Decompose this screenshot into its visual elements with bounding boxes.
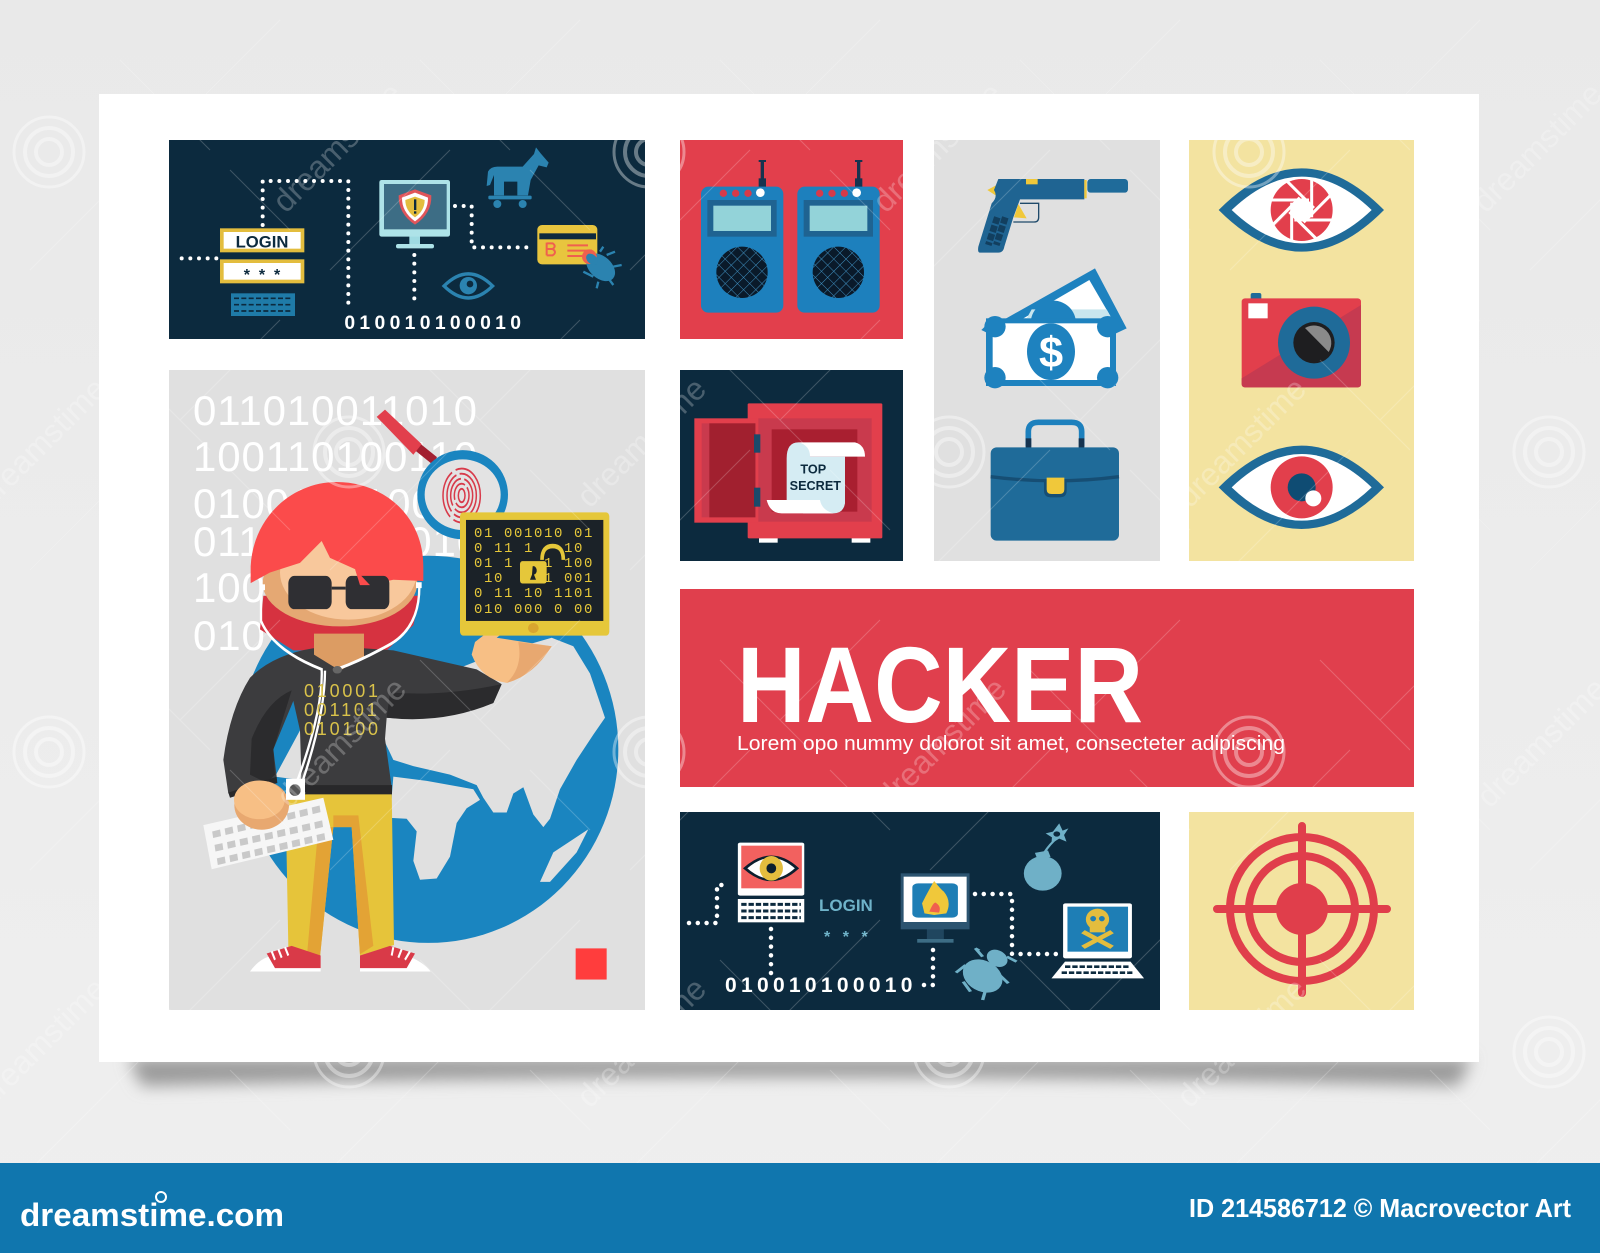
icon: open safe bbox=[694, 403, 882, 543]
connector dots bbox=[689, 885, 1058, 985]
icon: walkie talkie left bbox=[701, 160, 783, 313]
icon: open padlock bbox=[520, 546, 563, 583]
panel: attack network bbox=[680, 812, 1160, 1010]
character: sunglasses bbox=[288, 569, 389, 609]
panel: login network bbox=[169, 140, 645, 339]
watermark overlay: dreamstime bbox=[569, 370, 713, 514]
icon: walkie talkie right bbox=[797, 160, 880, 313]
password field: * * * bbox=[244, 267, 281, 284]
tablet binary text: 01 1 1 100 bbox=[474, 556, 594, 572]
connector dots bbox=[182, 181, 533, 307]
logo spiral bbox=[156, 1192, 166, 1202]
subtitle: Lorem opo nummy dolorot sit amet, consecteter adipiscing bbox=[737, 733, 1285, 755]
password field bbox=[220, 259, 304, 284]
icon: bug bbox=[955, 947, 1017, 1000]
icon: shutter eye bbox=[1219, 168, 1384, 252]
character: back hair bbox=[260, 596, 420, 650]
character: sweater bbox=[223, 648, 502, 798]
panel: walkie talkies bbox=[680, 140, 903, 339]
sweater binary text: 001101 bbox=[304, 700, 380, 720]
panel: gun money briefcase bbox=[934, 140, 1160, 561]
binary background text: 100110 bbox=[193, 564, 335, 611]
character: left hand bbox=[234, 780, 289, 830]
character: keyboard bbox=[203, 798, 333, 869]
title: HACKER bbox=[737, 624, 1143, 745]
binary background text bbox=[193, 387, 484, 659]
character: hair fringe bbox=[251, 482, 423, 585]
panel: safe bbox=[680, 370, 903, 561]
icon: dollar bills bbox=[981, 268, 1127, 388]
tablet binary text: 0 11 1 10 bbox=[474, 541, 584, 557]
sweater binary text: 010001 bbox=[304, 681, 381, 701]
watermark overlay: dreamstime bbox=[265, 75, 409, 219]
icon: bug bbox=[581, 247, 622, 288]
accent square bbox=[576, 948, 607, 980]
watermark overlay: dreamstime bbox=[869, 670, 1013, 814]
login field bbox=[220, 228, 304, 252]
footer logo: dreamstime.com bbox=[20, 1197, 284, 1233]
character: neck bbox=[314, 634, 364, 671]
binary string: 010010100010 bbox=[344, 313, 525, 334]
icon: secret document: SECRET bbox=[790, 479, 841, 493]
character: id badge bbox=[286, 779, 305, 800]
panel: target bbox=[1189, 812, 1414, 1010]
white card bbox=[99, 94, 1479, 1062]
icon: secret document: TOP bbox=[800, 462, 827, 476]
watermark overlay: dreamstime bbox=[865, 75, 1009, 219]
watermark overlay: dreamstime bbox=[569, 970, 713, 1114]
tablet binary text: 010 000 0 00 bbox=[474, 602, 594, 618]
login field: LOGIN bbox=[236, 232, 288, 251]
watermark overlay: dreamstime bbox=[1169, 370, 1313, 514]
icon: monitor with shield bbox=[379, 180, 450, 248]
icon: red iris eye bbox=[1219, 446, 1384, 529]
panel: eyes and camera bbox=[1189, 140, 1414, 561]
panel: hacker title banner bbox=[680, 589, 1414, 787]
binary background text: 010010010010 bbox=[193, 480, 484, 527]
icon: secret document bbox=[767, 442, 865, 513]
tablet binary text: 0 11 10 1101 bbox=[474, 586, 594, 602]
card shadow bbox=[128, 1058, 1472, 1086]
binary background text: 100110100110 bbox=[193, 433, 478, 480]
icon: trojan horse bbox=[487, 147, 549, 208]
watermark overlay: dreamstime bbox=[1169, 970, 1313, 1114]
icon: pistol with silencer bbox=[978, 179, 1128, 253]
illustration: globe bbox=[238, 556, 618, 943]
binary string: 010010100010 bbox=[725, 974, 917, 997]
binary background text: 011010010010 bbox=[193, 518, 481, 565]
binary background text: 011010011010 bbox=[193, 387, 478, 434]
character: shoes bbox=[250, 946, 431, 972]
image credit: ID 214586712 © Macrovector Art bbox=[1189, 1193, 1571, 1223]
password stars: *** bbox=[824, 929, 880, 946]
binary background text: 010100 bbox=[193, 612, 339, 659]
login label: LOGIN bbox=[819, 896, 873, 915]
icon: keyboard bbox=[231, 293, 295, 316]
character: face bbox=[263, 525, 417, 626]
icon: firewall monitor bbox=[901, 873, 970, 943]
icon: credit card bbox=[537, 225, 597, 264]
character: right hand bbox=[472, 620, 552, 683]
icon: bomb bbox=[1024, 823, 1068, 891]
character: earphone cable bbox=[259, 585, 422, 781]
icon: dollar bills: $ bbox=[1039, 329, 1063, 377]
tablet binary text: 01 001010 01 bbox=[474, 526, 594, 542]
panel: hacker character bbox=[169, 370, 645, 1010]
footer bar bbox=[0, 1163, 1600, 1253]
sweater binary text: 010100 bbox=[304, 719, 381, 739]
icon: camera bbox=[1242, 293, 1361, 387]
icon: crosshair target bbox=[1217, 826, 1387, 993]
watermark overlay: dreamstime bbox=[269, 670, 413, 814]
icon: computer with eye bbox=[738, 843, 804, 922]
icon: briefcase bbox=[991, 422, 1119, 541]
character: trousers bbox=[286, 789, 394, 957]
tablet binary text bbox=[474, 526, 594, 618]
icon: eye bbox=[444, 274, 493, 298]
sweater binary text bbox=[304, 681, 381, 739]
icon: magnifier with fingerprint bbox=[377, 410, 504, 535]
tablet binary text: 10 1 001 bbox=[474, 571, 594, 587]
icon: laptop with skull bbox=[1051, 903, 1144, 978]
icon: tablet with binary and open lock bbox=[460, 512, 609, 636]
